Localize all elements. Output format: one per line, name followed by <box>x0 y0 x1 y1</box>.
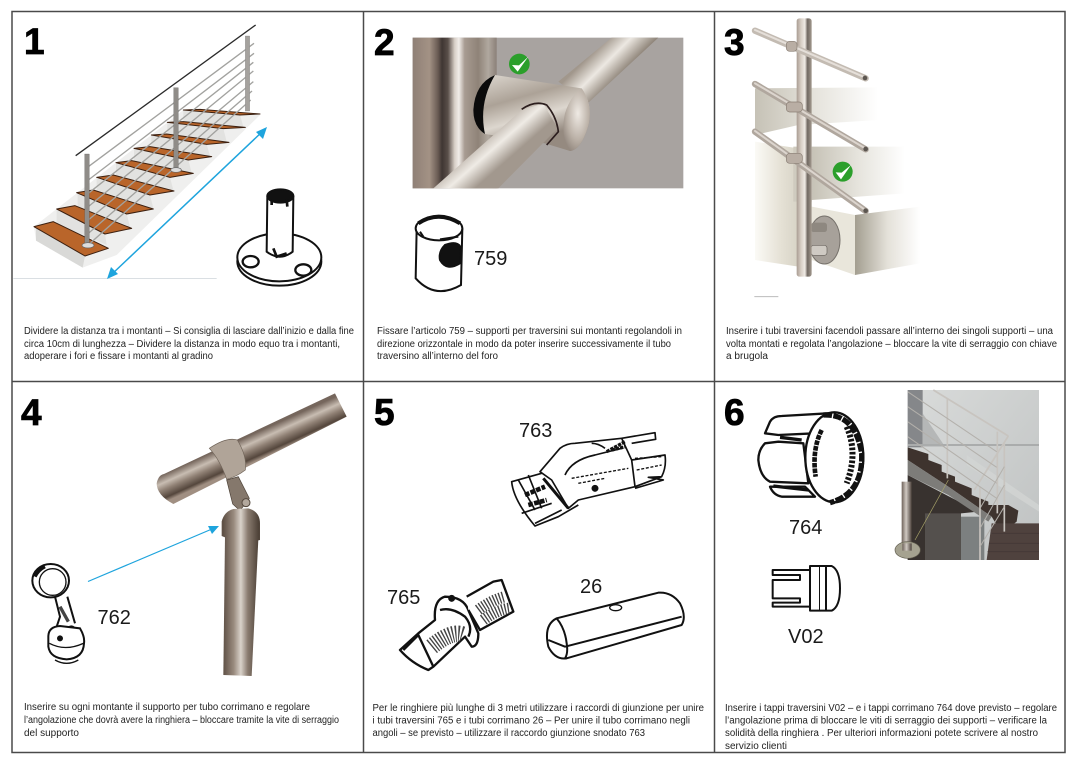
panel 4: handrail support 762 <box>21 392 347 739</box>
panel 5: junction fittings <box>372 392 704 739</box>
illustration: staircase with handrail and cable rails <box>13 25 260 278</box>
step number 2: 2 <box>374 22 395 63</box>
instruction text 2: direzione orizzontale in modo da poter inserire successivamente il tubo <box>377 339 671 350</box>
panel 1: dividing the distance between posts <box>13 21 354 362</box>
instruction text 3: volta montati e regolata l’angolazione – bloccare la vite di serraggio con chiave <box>726 339 1057 350</box>
instruction text 2: traversino all’interno del foro <box>377 351 498 362</box>
icon: articulated joint 763 <box>512 433 665 526</box>
label 765: 765 <box>387 587 420 609</box>
instruction text 6: servizio clienti <box>725 741 787 752</box>
label 763: 763 <box>519 420 552 442</box>
instruction text 6 <box>725 703 1057 752</box>
instruction text 4: Inserire su ogni montante il supporto per tubo corrimano e regolare <box>24 702 310 713</box>
step number 1: 1 <box>24 21 45 62</box>
icon: green check mark <box>509 54 530 74</box>
icon: part 759 cylinder <box>416 216 462 291</box>
icon: part 762 ring support <box>32 564 84 663</box>
instruction text 5: angoli – se previsto – utilizzare il raccordo giunzione snodato 763 <box>372 728 645 739</box>
icon: green check mark <box>833 162 853 182</box>
photo: post with three tubes on steps <box>754 18 920 297</box>
photo: finished staircase railing with post detail <box>895 390 1039 560</box>
label 764: 764 <box>789 517 822 539</box>
label V02: V02 <box>788 626 824 648</box>
photo: clamp on post with tube <box>413 38 683 188</box>
label 762: 762 <box>98 607 131 629</box>
instruction text 2: Fissare l’articolo 759 – supporti per traversini sui montanti regolandoli in <box>377 326 682 337</box>
instruction text 3: a brugola <box>726 351 768 362</box>
instruction text 2 <box>377 326 682 362</box>
instruction text 6: l’angolazione prima di bloccare le viti di serraggio dei supporti – verificare la <box>725 716 1047 726</box>
instruction text 6: solidità della ringhiera . Per ulteriori informazioni potete scrivere al nostro <box>725 728 1038 739</box>
photo: handrail tube on adjustable support and post <box>157 393 347 676</box>
arrow: from part 762 to the post <box>88 526 219 582</box>
instruction text 4 <box>24 702 339 739</box>
panel 2: fixing the 759 supports <box>374 22 683 362</box>
instruction text 4: del supporto <box>24 728 79 739</box>
instruction text 6: Inserire i tappi traversini V02 – e i tappi corrimano 764 dove previsto – regolare <box>725 703 1057 714</box>
instruction text 4: l’angolazione che dovrà avere la ringhiera – bloccare tramite la vite di serraggio <box>24 715 339 726</box>
instruction text 3: Inserire i tubi traversini facendoli passare all’interno dei singoli supporti – una <box>726 326 1053 337</box>
label 759: 759 <box>474 248 507 270</box>
label 26: 26 <box>580 576 602 598</box>
icon: connector tube 26 <box>547 593 684 659</box>
icon: joint 765 <box>400 580 513 670</box>
icon: handrail cap 764 <box>758 412 863 503</box>
instruction text 5: Per le ringhiere più lunghe di 3 metri utilizzare i raccordi di giunzione per unire <box>372 703 704 714</box>
icon: post with round base plate <box>237 189 321 286</box>
panel 3: inserting the traversal tubes <box>724 18 1057 362</box>
arrow: distance along the staircase <box>107 127 267 279</box>
icon: tube cap V02 <box>773 566 840 611</box>
instruction text 1: adoperare i fori e fissare i montanti al gradino <box>24 351 213 362</box>
panel 6: end caps and finished railing <box>724 390 1057 752</box>
instruction text 1: circa 10cm di lunghezza – Dividere la distanza in modo equo tra i montanti, <box>24 339 340 350</box>
step number 5: 5 <box>374 392 395 433</box>
step number 6: 6 <box>724 392 745 433</box>
instruction text 1 <box>24 326 354 362</box>
instruction text 1: Dividere la distanza tra i montanti – Si consiglia di lasciare dall’inizio e dalla fine <box>24 326 354 337</box>
instruction text 5: i tubi traversini 765 e i tubi corrimano 26 – Per unire il tubo corrimano negli <box>372 716 690 726</box>
instruction text 3 <box>726 326 1057 362</box>
instruction text 5 <box>372 703 704 739</box>
step number 3: 3 <box>724 22 745 63</box>
step number 4: 4 <box>21 392 42 433</box>
